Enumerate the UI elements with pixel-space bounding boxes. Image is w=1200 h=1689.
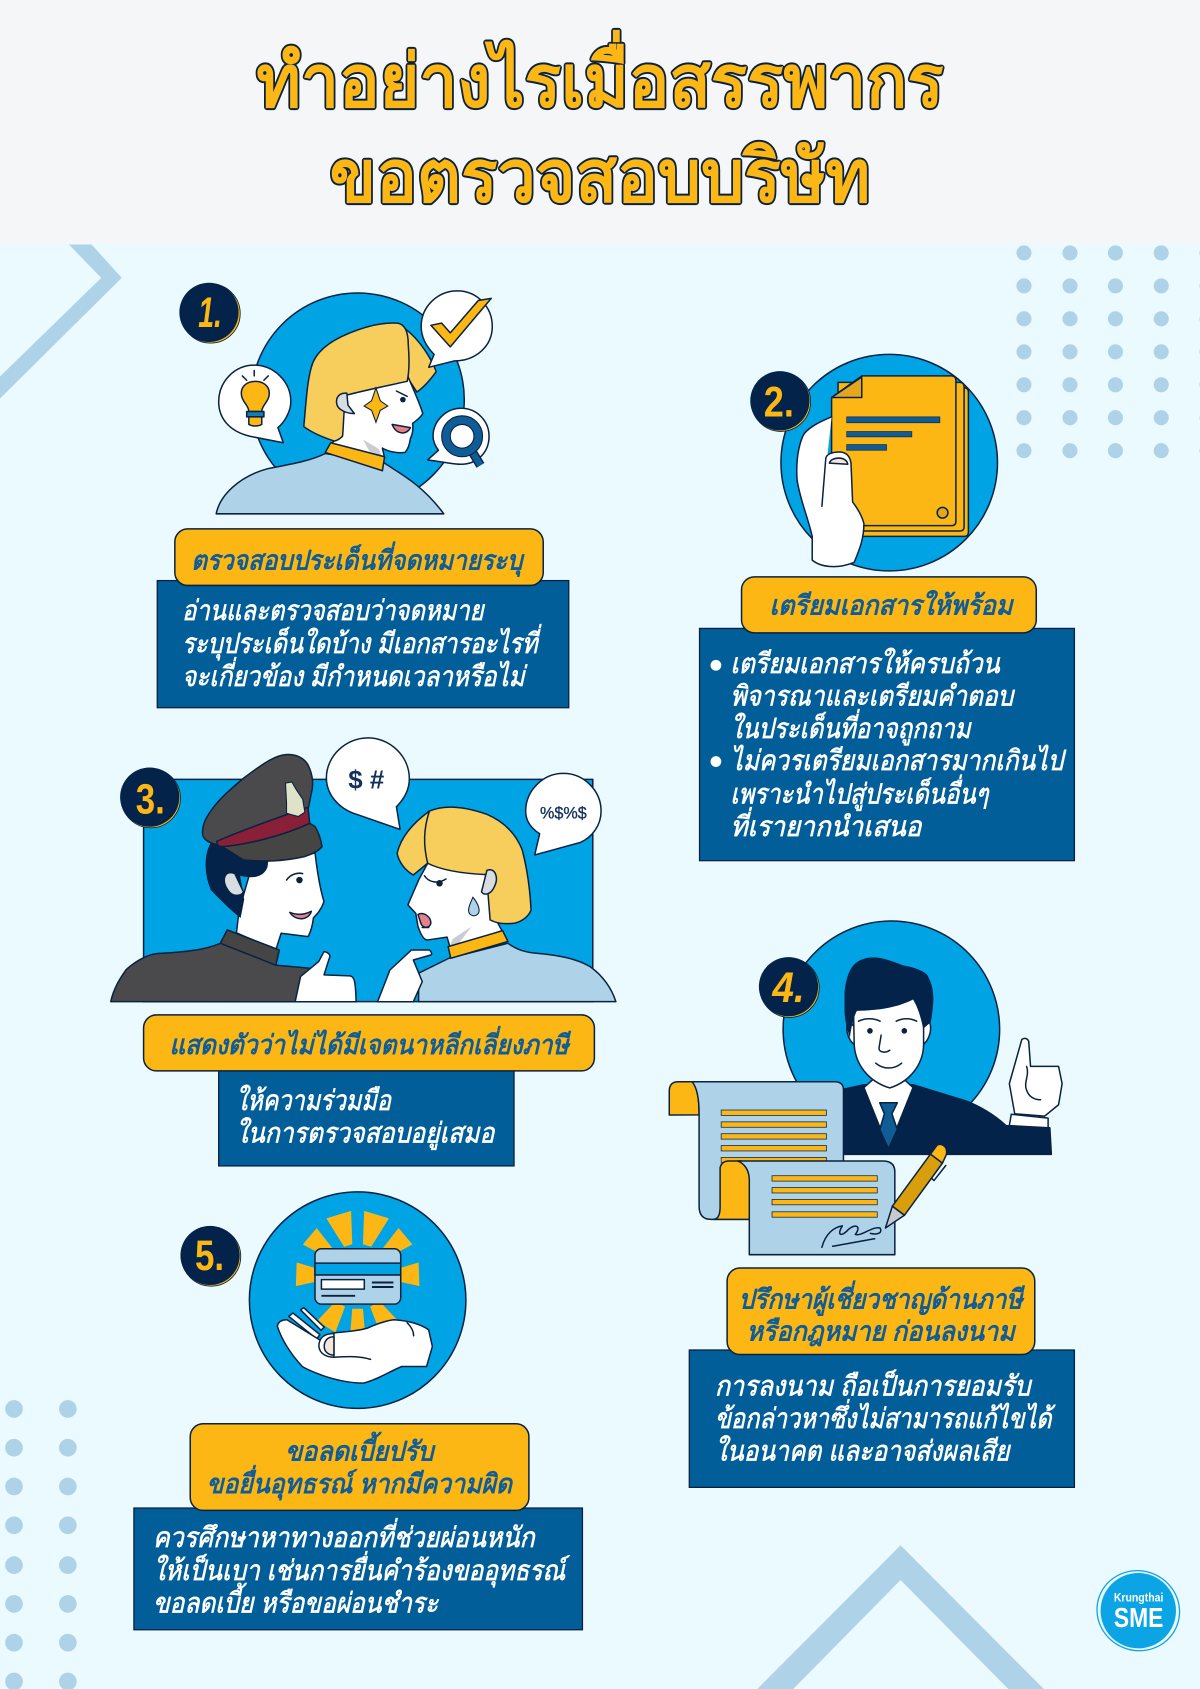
body text 2: เพราะนำไปสู่ประเด็นอื่นๆ <box>730 775 990 812</box>
step number badge 2: 2. <box>764 378 794 426</box>
body text 4: ข้อกล่าวหาซึ่งไม่สามารถแก้ไขได้ <box>715 1399 1056 1434</box>
logo: Krungthai SME: SME <box>1114 1602 1163 1633</box>
step number badge 1 <box>179 283 240 343</box>
header band <box>0 0 1200 243</box>
panel: step 5 <box>134 1192 582 1630</box>
body text 3: ในการตรวจสอบอยู่เสมอ <box>236 1117 495 1151</box>
panel: step 1 <box>157 283 569 708</box>
illustration: officer and woman talking <box>111 738 616 1002</box>
decorative chevron bottom right <box>757 1545 1044 1689</box>
step number badge 4: 4. <box>771 964 805 1012</box>
step number badge 1: 1. <box>198 289 222 337</box>
step number badge 3: 3. <box>136 775 165 823</box>
heading box 4: หรือกฎหมาย ก่อนลงนาม <box>746 1317 1017 1347</box>
body text 1: ระบุประเด็นใดบ้าง มีเอกสารอะไรที่ <box>182 624 542 661</box>
title: ทำอย่างไรเมื่อสรรพากร <box>256 30 944 123</box>
decorative dots top right <box>1016 245 1200 458</box>
heading box 4 <box>689 1268 1074 1487</box>
logo: Krungthai SME: Krungthai <box>1114 1591 1163 1605</box>
illustration: consultant and documents <box>669 921 1062 1255</box>
body text 1 <box>182 595 542 692</box>
body text 1: จะเกี่ยวข้อง มีกำหนดเวลาหรือไม่ <box>182 657 528 692</box>
heading box 5: ขอลดเบี้ยปรับ <box>285 1432 436 1467</box>
decorative chevron top left <box>0 245 122 399</box>
step number badge 5 <box>180 1226 241 1286</box>
body text 2: ที่เรายากนำเสนอ <box>730 807 923 842</box>
panel: step 4 <box>669 921 1074 1487</box>
heading box 1: ตรวจสอบประเด็นที่จดหมายระบุ <box>191 540 525 577</box>
illustration: officer and woman talking: %$%$ <box>540 805 587 823</box>
heading box 2 <box>700 577 1074 861</box>
illustration: woman thinking <box>216 291 492 514</box>
decorative dots bottom left <box>5 1400 77 1689</box>
body text 2: ไม่ควรเตรียมเอกสารมากเกินไป <box>730 744 1067 776</box>
heading box 2: เตรียมเอกสารให้พร้อม <box>770 590 1015 621</box>
step number badge 4 <box>759 957 819 1017</box>
body text 5 <box>153 1518 570 1618</box>
illustration: hand with card <box>249 1192 466 1408</box>
body text 3 <box>236 1084 495 1151</box>
heading box 5 <box>134 1424 582 1630</box>
title <box>256 30 944 217</box>
body text 5: ให้เป็นเบา เช่นการยื่นคำร้องขออุทธรณ์ <box>153 1551 570 1588</box>
body text 4 <box>715 1369 1056 1467</box>
body text 3: ให้ความร่วมมือ <box>236 1084 392 1116</box>
step number badge 2 <box>750 371 811 431</box>
body text 5: ขอลดเบี้ย หรือขอผ่อนชำระ <box>153 1582 439 1618</box>
body text 4: ในอนาคต และอาจส่งผลเสีย <box>715 1435 1011 1467</box>
body text 4: การลงนาม ถือเป็นการยอมรับ <box>715 1369 1032 1401</box>
body text 5: ควรศึกษาหาทางออกที่ช่วยผ่อนหนัก <box>153 1518 536 1553</box>
heading box 3 <box>144 1015 594 1166</box>
title: ขอตรวจสอบบริษัท <box>330 135 870 217</box>
step number badge 3 <box>120 767 180 828</box>
illustration: officer and woman talking: $ # <box>348 766 384 794</box>
panel: step 3 <box>111 738 616 1166</box>
step number badge 5: 5. <box>195 1232 224 1280</box>
heading box 3: แสดงตัวว่าไม่ได้มีเจตนาหลีกเลี่ยงภาษี <box>169 1025 571 1060</box>
body text 2: พิจารณาและเตรียมคำตอบ <box>730 681 1015 712</box>
logo: Krungthai SME <box>1086 1559 1191 1662</box>
body text 2: เตรียมเอกสารให้ครบถ้วน <box>730 647 1000 679</box>
heading box 5: ขอยื่นอุทธรณ์ หากมีความผิด <box>207 1464 513 1501</box>
heading box 4: ปรึกษาผู้เชี่ยวชาญด้านภาษี <box>739 1280 1025 1317</box>
body text 1: อ่านและตรวจสอบว่าจดหมาย <box>182 595 485 626</box>
illustration: hand holding documents <box>781 354 997 571</box>
panel: step 2 <box>700 354 1074 861</box>
body text 2: ในประเด็นที่อาจถูกถาม <box>730 709 972 746</box>
body text 2 <box>711 647 1067 842</box>
heading box 1 <box>157 529 569 708</box>
